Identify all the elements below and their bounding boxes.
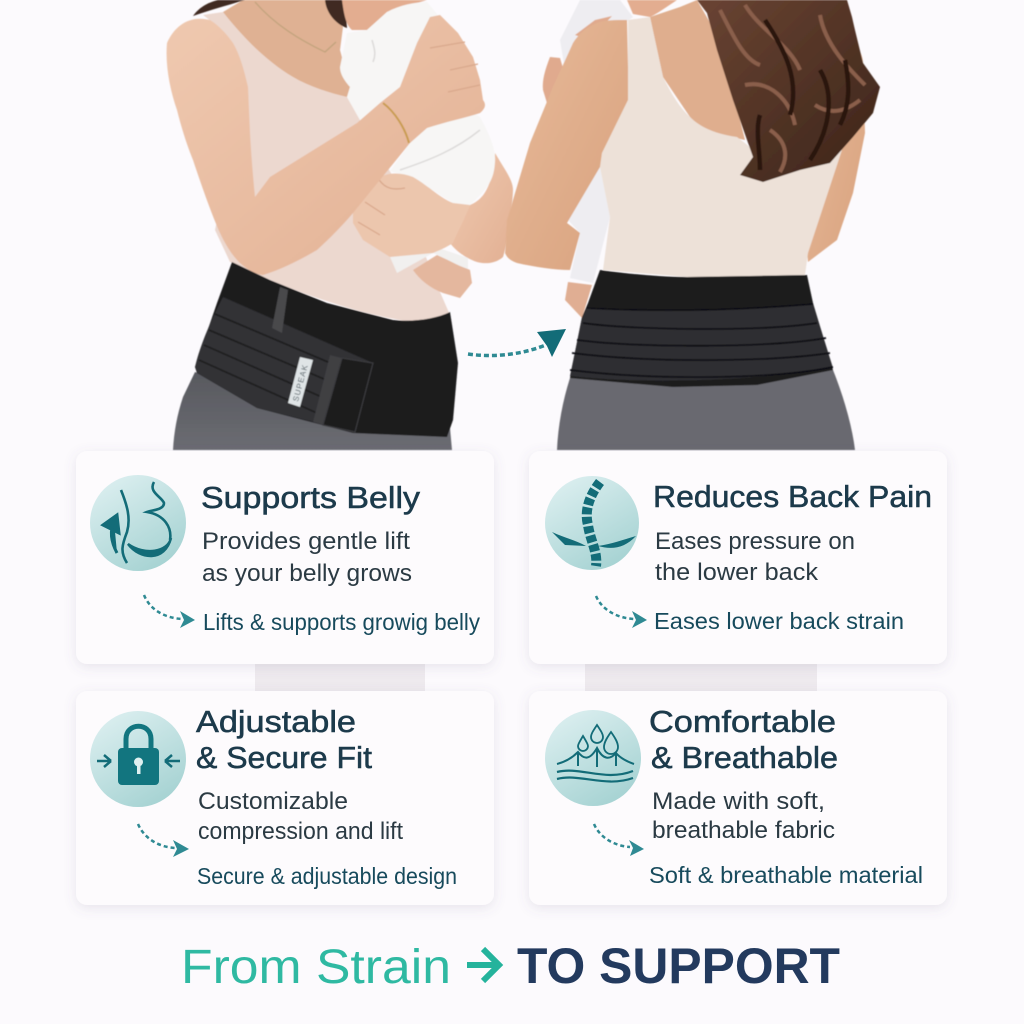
necklace: [255, 2, 336, 52]
text: Eases pressure on: [655, 528, 855, 555]
icon: breathable fabric: [545, 710, 641, 806]
wrap end patch: [323, 358, 373, 432]
baby top back: [560, 0, 633, 70]
belt tab: [272, 287, 288, 333]
brand tag: [288, 357, 313, 407]
baby hand back: [543, 16, 612, 103]
leggings back: [557, 370, 855, 450]
velcro strip: [313, 355, 342, 425]
belt lower wrap: [195, 297, 373, 432]
dashed arrow: [596, 596, 647, 628]
belly belt: [195, 262, 458, 437]
text: compression and lift: [198, 818, 403, 845]
text: Adjustable: [196, 704, 356, 739]
text: Comfortable: [649, 704, 836, 739]
photo: mother holding baby, front view with belt: [167, 0, 513, 450]
tagline: From Strain: [181, 941, 451, 994]
panel: reduces back pain: [529, 451, 947, 664]
text: Customizable: [198, 788, 348, 815]
photo: mother holding baby, back view with belt: [505, 0, 880, 450]
text: [649, 704, 838, 844]
text: & Secure Fit: [196, 740, 372, 775]
text: & Breathable: [651, 740, 838, 775]
benefit: Soft & breathable material: [649, 862, 923, 888]
baby lower back: [568, 160, 610, 283]
belt pleats: [570, 304, 833, 381]
fingers shadow: [430, 42, 480, 92]
baby wrap tail: [390, 245, 468, 273]
text: Supports Belly: [201, 480, 421, 515]
benefit: Lifts & supports growig belly: [203, 609, 480, 635]
benefit: Secure & adjustable design: [197, 863, 457, 889]
dashed arrow: [144, 595, 195, 628]
faded legs behind cards: [255, 660, 817, 694]
panel: comfortable and breathable: [529, 691, 947, 905]
tank top front: [203, 12, 450, 325]
text: [653, 479, 932, 586]
left arm back figure: [505, 20, 628, 270]
baby foot back: [565, 282, 592, 318]
baby face: [342, 0, 427, 30]
arrow between photos: [468, 329, 566, 357]
bracelet: [383, 103, 409, 143]
icon: belly: [90, 475, 186, 571]
brand tag: SUPEAK: [291, 363, 310, 403]
text: Provides gentle lift: [202, 528, 410, 555]
icon: arrow: [467, 949, 499, 981]
tagline: [181, 938, 840, 994]
text: breathable fabric: [652, 817, 835, 844]
icon: padlock: [90, 711, 186, 807]
text: [196, 704, 403, 845]
tagline: TO SUPPORT: [517, 938, 840, 994]
text: Reduces Back Pain: [653, 479, 932, 514]
dashed arrow: [594, 824, 644, 856]
leggings front: [173, 372, 452, 450]
icon: spine: [545, 476, 639, 570]
text: as your belly grows: [202, 560, 412, 587]
text: Made with soft,: [652, 788, 825, 815]
panel: supports belly: [76, 451, 494, 664]
dashed arrow: [138, 824, 189, 857]
benefit: Eases lower back strain: [654, 608, 904, 634]
back skin: [650, 0, 745, 140]
baby face back: [627, 0, 677, 17]
lower hand: [353, 174, 470, 257]
baby front: [340, 2, 495, 205]
back belt: [570, 270, 833, 387]
neck and chest: [223, 0, 350, 97]
tank top back: [600, 17, 842, 278]
panel: adjustable and secure fit: [76, 691, 494, 905]
right arm back figure: [806, 37, 865, 262]
baby foot: [413, 255, 472, 298]
text: [201, 480, 421, 587]
upper arm and forearm: [167, 15, 485, 275]
text: the lower back: [655, 559, 819, 586]
hair front: [193, 0, 347, 28]
hair back: [697, 0, 880, 182]
rear arm front figure: [450, 153, 513, 263]
